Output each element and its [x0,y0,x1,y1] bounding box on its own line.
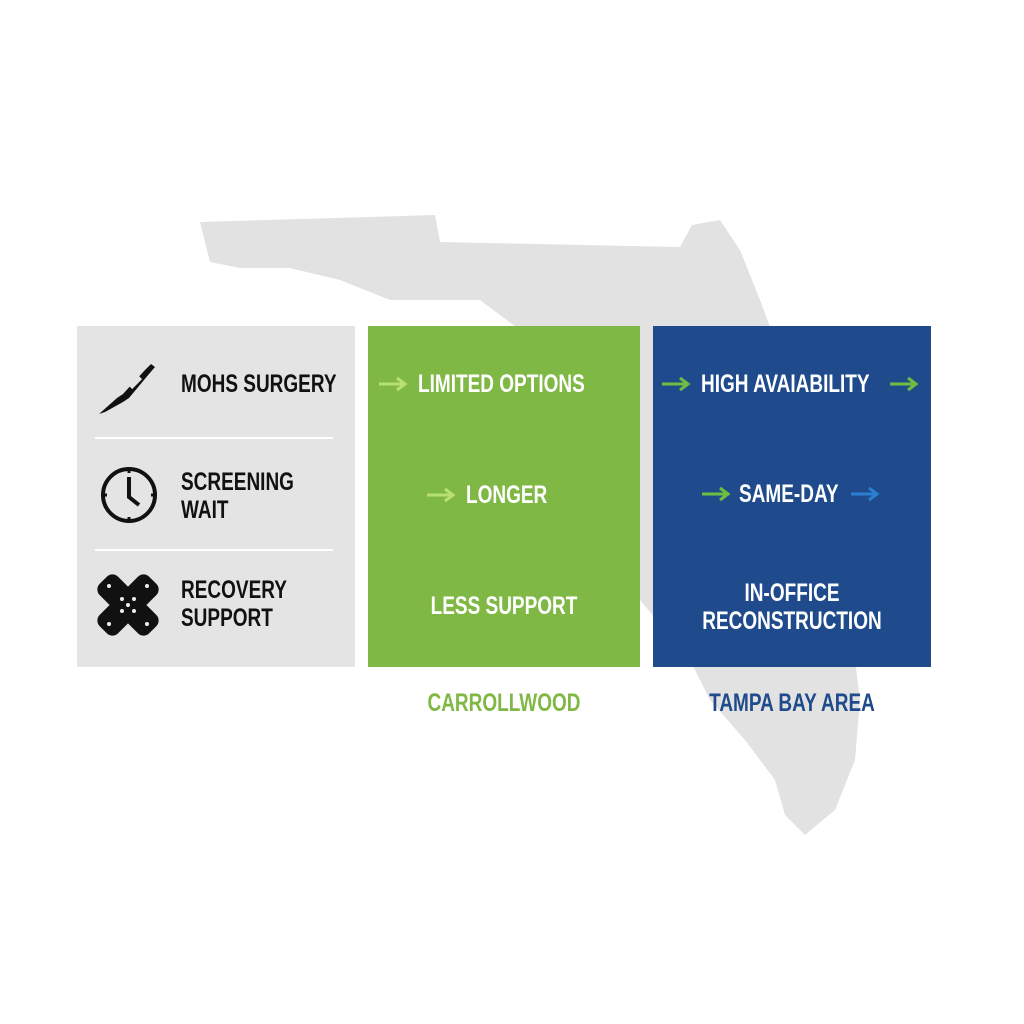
panel: categories [77,326,355,667]
arrow [890,376,918,392]
text: recovery support [181,576,287,632]
text: recovery support: SUPPORT [181,604,273,632]
panel: tampa bay area [653,326,931,667]
panel: carrollwood [368,326,640,667]
text: high availability: HIGH AVAIABILITY [701,370,870,398]
arrow [379,376,408,392]
label: tampa bay area: TAMPA BAY AREA [709,689,875,717]
text: mohs surgery: MOHS SURGERY [181,370,337,398]
icon: bandage [97,574,159,636]
arrow [662,376,690,392]
text: less support: LESS SUPPORT [431,592,577,620]
text: screening wait [181,468,294,524]
icon: clock [101,467,157,523]
text: in-office reconstruction [702,579,882,635]
text: screening wait: WAIT [181,496,228,524]
text: longer: LONGER [466,481,547,509]
label: carrollwood: CARROLLWOOD [427,689,581,717]
text: recovery support: RECOVERY [181,576,287,604]
arrow [851,486,880,502]
arrow [702,486,730,502]
icon: scalpel [99,364,155,414]
text: in-office reconstruction: IN-OFFICE [744,579,840,607]
text: same-day: SAME-DAY [739,480,839,508]
text: limited options: LIMITED OPTIONS [418,370,585,398]
text: screening wait: SCREENING [181,468,294,496]
arrow [427,488,456,502]
text: in-office reconstruction: RECONSTRUCTION [702,607,882,635]
